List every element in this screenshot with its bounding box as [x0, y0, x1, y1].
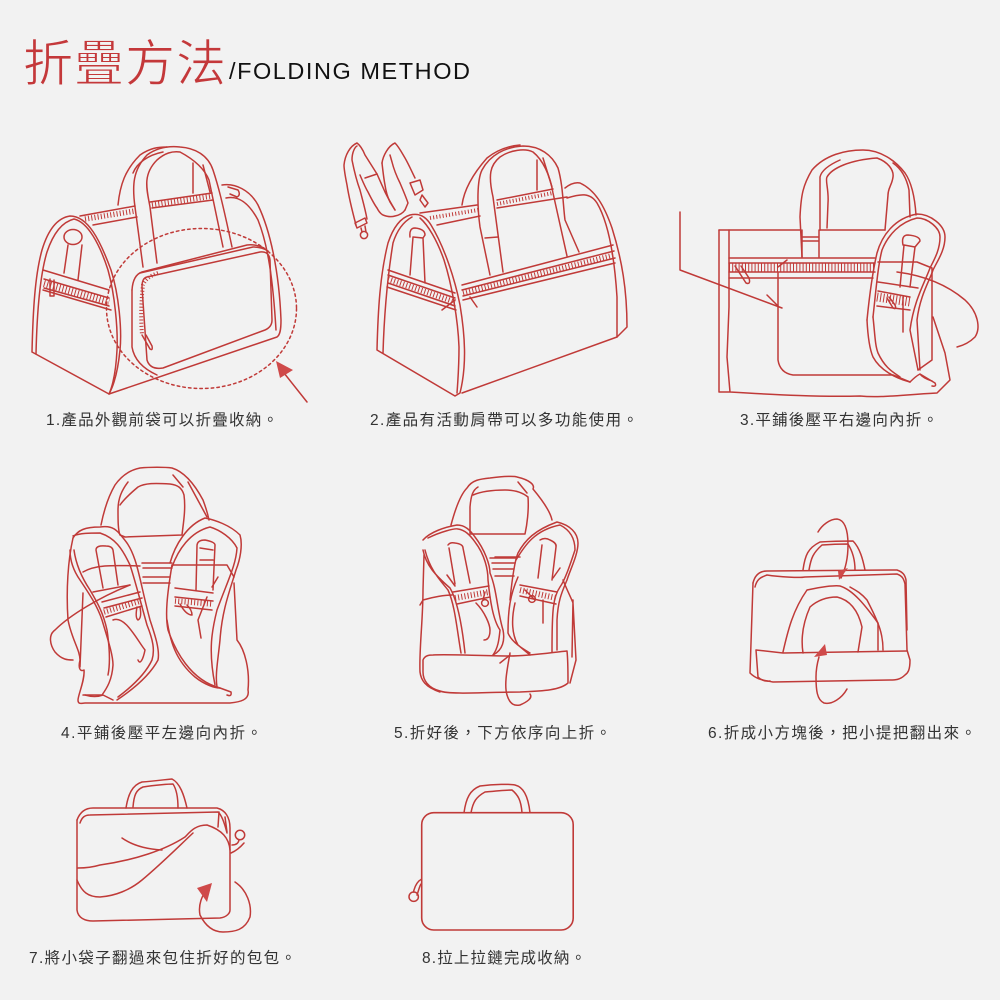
arrow: handle flip down — [818, 519, 848, 580]
panel: step 3 right side fold — [680, 150, 978, 397]
icon: zipper pull — [231, 830, 245, 853]
caption 1: 1.產品外觀前袋可以折疊收納。 — [46, 411, 278, 429]
arrow: fold upward — [500, 653, 531, 705]
caption 7: 7.將小袋子翻過來包住折好的包包。 — [29, 949, 296, 967]
caption 4: 4.平鋪後壓平左邊向內折。 — [61, 724, 262, 742]
panel: step 6 pull out small handle — [750, 519, 910, 703]
panel: step 4 left side fold — [50, 467, 248, 703]
panel: step 7 turn pocket over — [77, 779, 250, 932]
panel: step 1 bag with front pocket — [32, 147, 307, 402]
caption 6: 6.折成小方塊後，把小提把翻出來。 — [708, 724, 976, 742]
caption 3: 3.平鋪後壓平右邊向內折。 — [740, 411, 938, 429]
arrow: pocket flip up — [814, 644, 847, 703]
icon: zipper pull — [409, 879, 422, 901]
arrow: curved turn — [197, 882, 250, 932]
arrow: curved fold — [50, 585, 130, 660]
title — [23, 36, 470, 92]
panel: step 2 bag with shoulder strap — [344, 143, 627, 396]
caption 5: 5.折好後，下方依序向上折。 — [394, 724, 611, 742]
caption 2: 2.產品有活動肩帶可以多功能使用。 — [370, 411, 638, 429]
dotted circle highlight — [106, 228, 296, 388]
shoulder strap — [344, 143, 428, 239]
title: 折疊方法 — [23, 36, 226, 92]
panel: step 5 lower edge folded up — [420, 476, 578, 705]
arrow: pointing to circle — [276, 361, 307, 402]
arrow: fold inward — [680, 212, 782, 308]
arrow: curved fold — [897, 272, 978, 347]
caption 8: 8.拉上拉鏈完成收納。 — [422, 949, 586, 967]
title: /FOLDING METHOD — [229, 58, 470, 84]
folded lower edge — [423, 651, 568, 693]
panel: step 8 zipped up — [409, 784, 573, 930]
